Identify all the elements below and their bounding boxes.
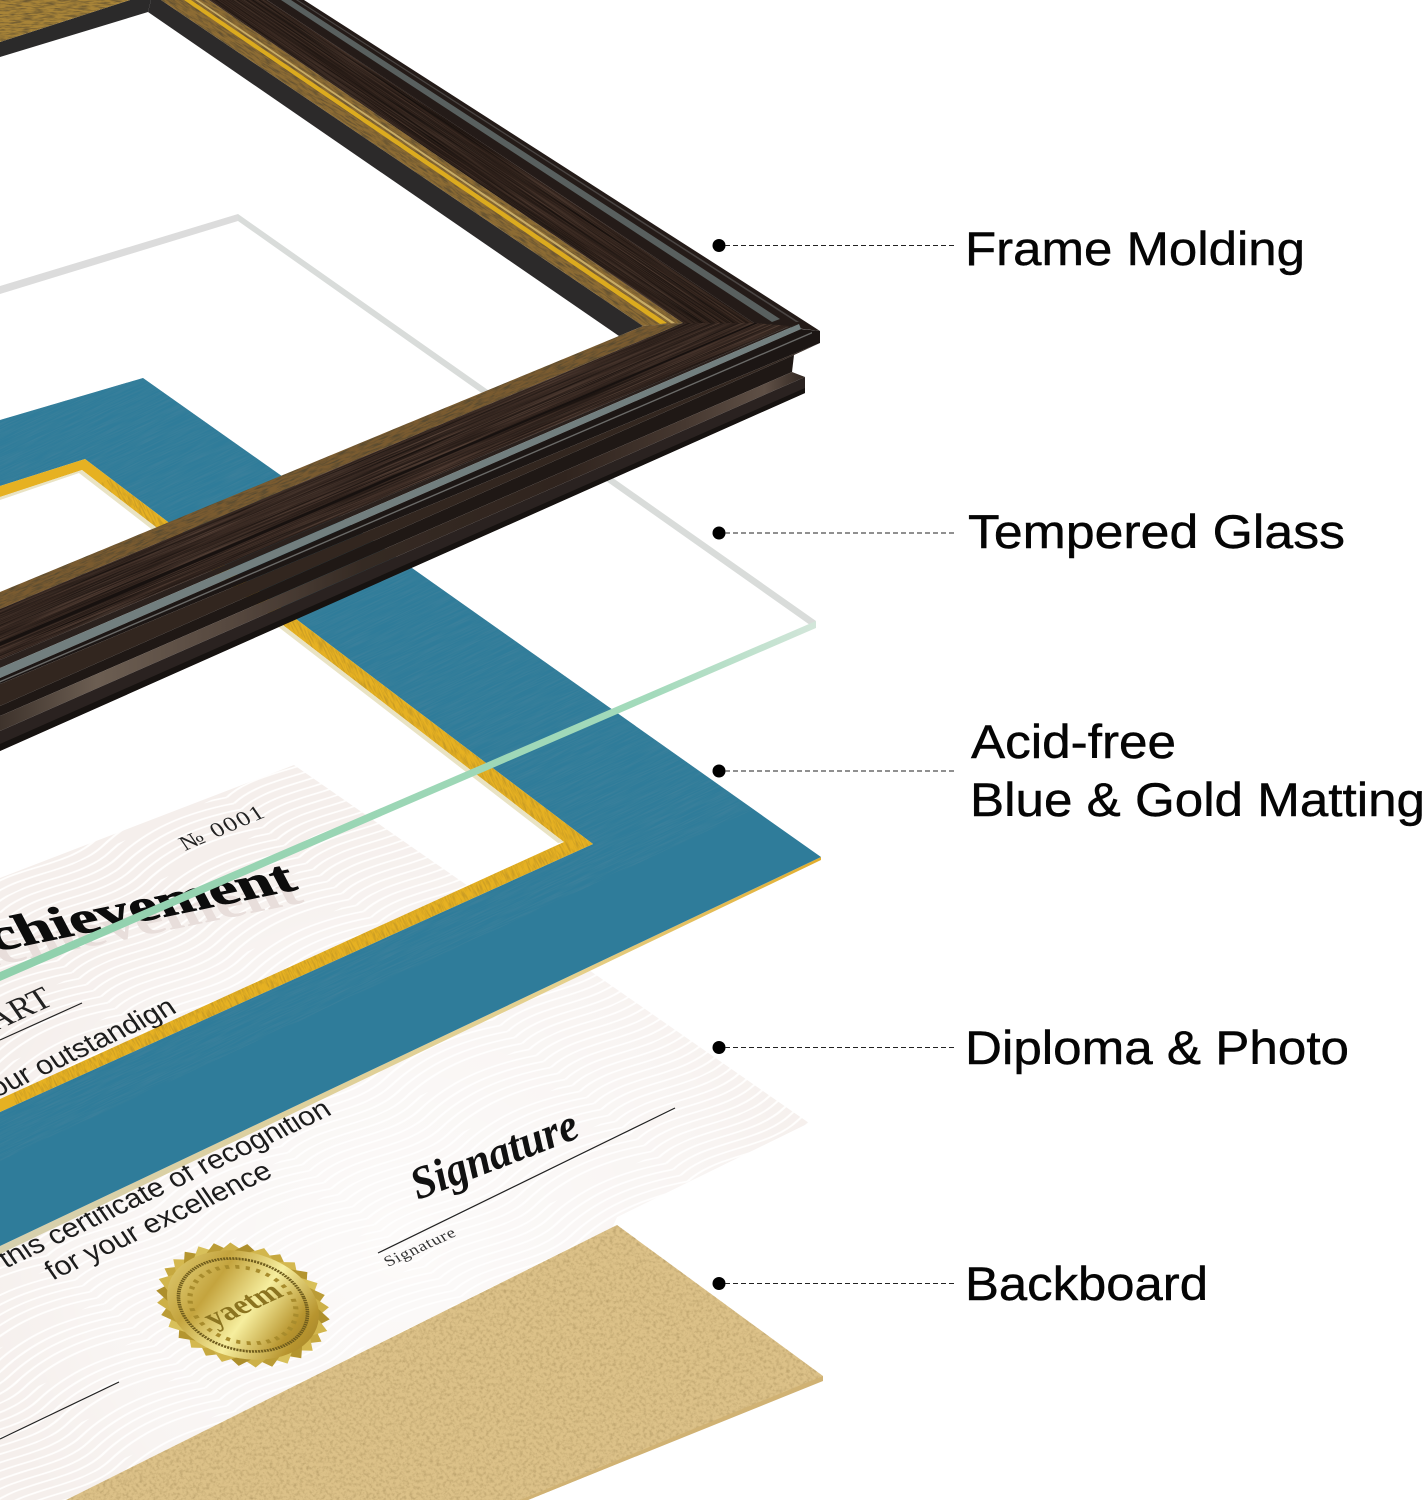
cream liner: [0, 470, 564, 843]
label: Tempered Glass: [968, 506, 1345, 559]
front rail bronze roll: [0, 372, 805, 731]
top rail ridges: [267, 0, 820, 331]
top rail wood: [209, 0, 754, 323]
certificate sheet: [0, 765, 809, 1500]
top rail gold band: [161, 0, 683, 326]
callout: backboard: [712, 1258, 1208, 1311]
leader line: [725, 1282, 955, 1284]
seal logo: yaetm: [195, 1276, 290, 1333]
mat edge: [0, 857, 821, 1254]
backboard sheet: [66, 1225, 823, 1500]
name underline: [0, 1003, 82, 1040]
panel: frame molding: [0, 0, 820, 751]
label: Diploma & Photo: [965, 1022, 1349, 1075]
front rail gold texture: [0, 323, 682, 609]
recognition text: this certificate of recognition: [0, 1094, 337, 1274]
front rail wood grain: [0, 323, 787, 660]
front rail dark channel: [0, 323, 758, 646]
top rail highlight: [281, 0, 780, 322]
top rail gold texture: [162, 0, 682, 326]
callout: tempered glass: [712, 506, 1345, 559]
top rail wood grain: [209, 0, 754, 323]
label: Backboard: [965, 1258, 1208, 1311]
front rail groove: [0, 355, 794, 716]
seal starburst: [132, 1233, 354, 1377]
leader line: [725, 770, 955, 772]
seal dotted ring: [175, 1261, 311, 1349]
front rail upper shoulder: [0, 329, 820, 684]
signature caption: Signature: [380, 1224, 459, 1270]
mat linen texture: [0, 378, 754, 1160]
front rail bottom shade: [0, 388, 805, 751]
callout: matting: [712, 716, 1425, 827]
panel: diploma and photo certificate: [0, 765, 809, 1500]
callout: diploma and photo: [712, 1022, 1349, 1075]
back rail lip: [0, 0, 151, 57]
top rail fine line: [296, 0, 799, 322]
backboard texture: [60, 1220, 830, 1500]
front rail band: [0, 324, 799, 668]
callout: frame molding: [712, 223, 1305, 276]
lower line: [0, 1382, 119, 1439]
leader dot: [712, 239, 726, 252]
front rail grey highlight: [0, 324, 801, 678]
front rail side face: [0, 343, 820, 706]
glass front edge: [0, 621, 816, 981]
label line one: Acid-free: [971, 716, 1176, 769]
leader dot: [712, 1041, 726, 1054]
serial number: № 0001: [174, 801, 269, 856]
top rail bright gilding: [184, 0, 667, 324]
glass right edge: [238, 214, 816, 625]
seal medallion: [161, 1252, 325, 1358]
top rail inner lip: [148, 0, 643, 336]
back rail gold texture: [0, 0, 127, 42]
leader dot: [712, 1277, 726, 1290]
panel: backboard: [60, 1220, 830, 1500]
back rail gold: [0, 0, 130, 42]
gold bevel: [0, 459, 593, 1112]
gold bevel texture: [14, 478, 592, 1104]
label line two: Blue & Gold Matting: [970, 774, 1425, 827]
leader line: [725, 1046, 955, 1048]
excellence text: for your excellence: [39, 1156, 278, 1286]
mat board: [0, 378, 821, 1246]
front rail bottom lip: [0, 377, 805, 751]
front rail wood: [0, 323, 790, 660]
panel: tempered glass: [0, 214, 816, 981]
signature line: [378, 1108, 675, 1253]
leader dot: [712, 526, 726, 540]
leader line: [725, 532, 955, 534]
signature script: Signature: [403, 1099, 586, 1210]
glass back edge: [0, 214, 238, 294]
label: Frame Molding: [965, 223, 1305, 276]
backboard edge: [520, 1376, 823, 1500]
gold seal: [132, 1233, 354, 1377]
leader line: [725, 244, 955, 246]
front rail fine highlight: [0, 332, 812, 682]
certificate light center: [0, 765, 809, 1500]
front rail gold edge: [0, 323, 683, 609]
leader dot: [712, 764, 726, 778]
top rail pale gilding: [195, 0, 675, 323]
panel: blue and gold matting: [0, 378, 821, 1254]
